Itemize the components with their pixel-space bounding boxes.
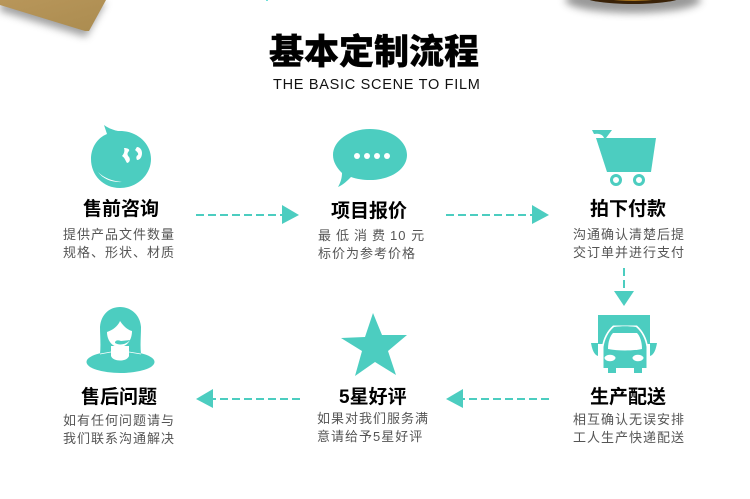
title: 基本定制流程 <box>269 33 479 72</box>
description: 如有任何问题请与 <box>63 413 175 428</box>
subtitle: THE BASIC SCENE TO FILM <box>273 77 481 93</box>
heading: 售后问题 <box>81 387 157 408</box>
description: 交订单并进行支付 <box>573 245 685 260</box>
heading: 生产配送 <box>590 387 666 408</box>
heading: 售前咨询 <box>83 199 159 220</box>
description: 意请给予5星好评 <box>317 429 423 444</box>
description: 标价为参考价格 <box>318 246 416 261</box>
heading: 5星好评 <box>339 387 407 408</box>
heading: 项目报价 <box>331 201 407 222</box>
step 4: production and delivery <box>573 315 685 445</box>
icon: star <box>341 313 407 376</box>
heading: 拍下付款 <box>590 199 666 220</box>
description <box>573 412 685 445</box>
description: 最低消费10 元 <box>318 228 425 243</box>
icon: speech bubble <box>333 129 407 187</box>
description: 提供产品文件数量 <box>63 227 175 242</box>
step 6: after-sales <box>63 307 175 446</box>
description <box>318 228 425 261</box>
description: 规格、形状、材质 <box>63 245 175 260</box>
step 5: five-star review <box>317 313 429 444</box>
description: 如果对我们服务满 <box>317 411 429 426</box>
description <box>63 227 175 260</box>
icon: support agent <box>86 307 154 373</box>
description: 我们联系沟通解决 <box>63 431 175 446</box>
icon: truck <box>591 315 657 373</box>
icon: droplet chat <box>91 125 151 188</box>
step 1: pre-sale consultation <box>63 125 175 260</box>
description: 工人生产快递配送 <box>573 430 685 445</box>
description: 相互确认无误安排 <box>573 412 685 427</box>
description: 沟通确认清楚后提 <box>573 227 685 242</box>
icon: shopping cart <box>592 130 656 186</box>
step 2: quotation <box>318 129 425 261</box>
description <box>63 413 175 446</box>
description <box>573 227 685 260</box>
description <box>317 411 429 444</box>
step 3: payment <box>573 130 685 260</box>
